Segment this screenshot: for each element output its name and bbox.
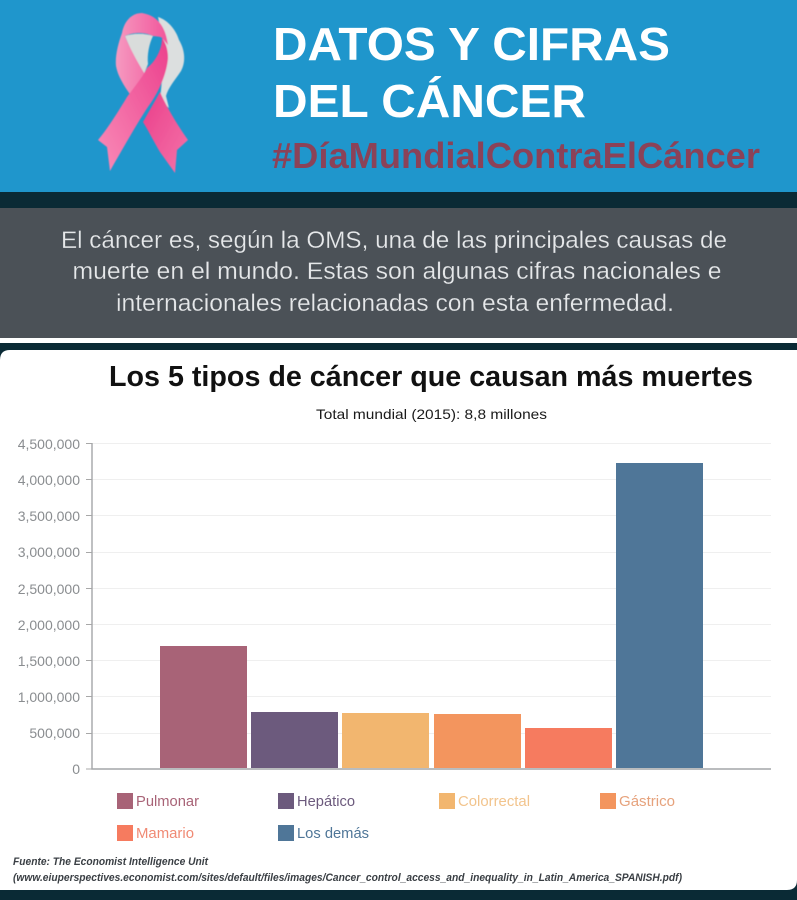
legend: Mamario bbox=[136, 826, 194, 842]
y axis labels: 2,000,000 bbox=[18, 617, 80, 633]
bars bbox=[160, 463, 703, 768]
legend: Pulmonar bbox=[136, 794, 199, 810]
y axis labels: 0 bbox=[72, 761, 80, 777]
title: DEL CÁNCER bbox=[273, 75, 586, 127]
chart title: Los 5 tipos de cáncer que causan más muertes bbox=[109, 361, 753, 393]
chart panel bbox=[0, 350, 797, 890]
y axis labels: 500,000 bbox=[29, 725, 80, 741]
title: DATOS Y CIFRAS bbox=[273, 18, 670, 70]
title bbox=[273, 18, 670, 127]
source note bbox=[13, 856, 682, 884]
legend: Colorrectal bbox=[458, 794, 530, 810]
intro panel bbox=[0, 208, 797, 338]
header banner bbox=[0, 0, 797, 192]
bar chart bbox=[18, 436, 771, 777]
source note: (www.eiuperspectives.economist.com/sites/default/files/images/Cancer_control_access_and_inequality_in_Latin_America_SPANISH.pdf) bbox=[13, 872, 682, 884]
y axis labels: 4,500,000 bbox=[18, 436, 80, 452]
intro text: internacionales relacionadas con esta enfermedad. bbox=[116, 290, 674, 317]
y axis labels: 2,500,000 bbox=[18, 581, 80, 597]
intro text bbox=[61, 227, 727, 317]
chart subtitle: Total mundial (2015): 8,8 millones bbox=[316, 406, 547, 422]
y axis labels: 4,000,000 bbox=[18, 472, 80, 488]
intro text: muerte en el mundo. Estas son algunas cifras nacionales e bbox=[72, 258, 722, 285]
y axis labels: 1,500,000 bbox=[18, 653, 80, 669]
legend: Gástrico bbox=[619, 794, 675, 810]
legend: Hepático bbox=[297, 794, 355, 810]
y axis labels bbox=[18, 436, 80, 777]
icon: pink ribbon bbox=[98, 13, 188, 173]
hashtag: #DíaMundialContraElCáncer bbox=[272, 135, 760, 176]
dark band bbox=[0, 192, 797, 208]
y axis labels: 3,500,000 bbox=[18, 508, 80, 524]
legend: Los demás bbox=[297, 826, 369, 842]
y axis labels: 1,000,000 bbox=[18, 689, 80, 705]
intro text: El cáncer es, según la OMS, una de las principales causas de bbox=[61, 227, 727, 254]
legend bbox=[117, 793, 675, 842]
source note: Fuente: The Economist Intelligence Unit bbox=[13, 856, 209, 868]
y axis labels: 3,000,000 bbox=[18, 544, 80, 560]
